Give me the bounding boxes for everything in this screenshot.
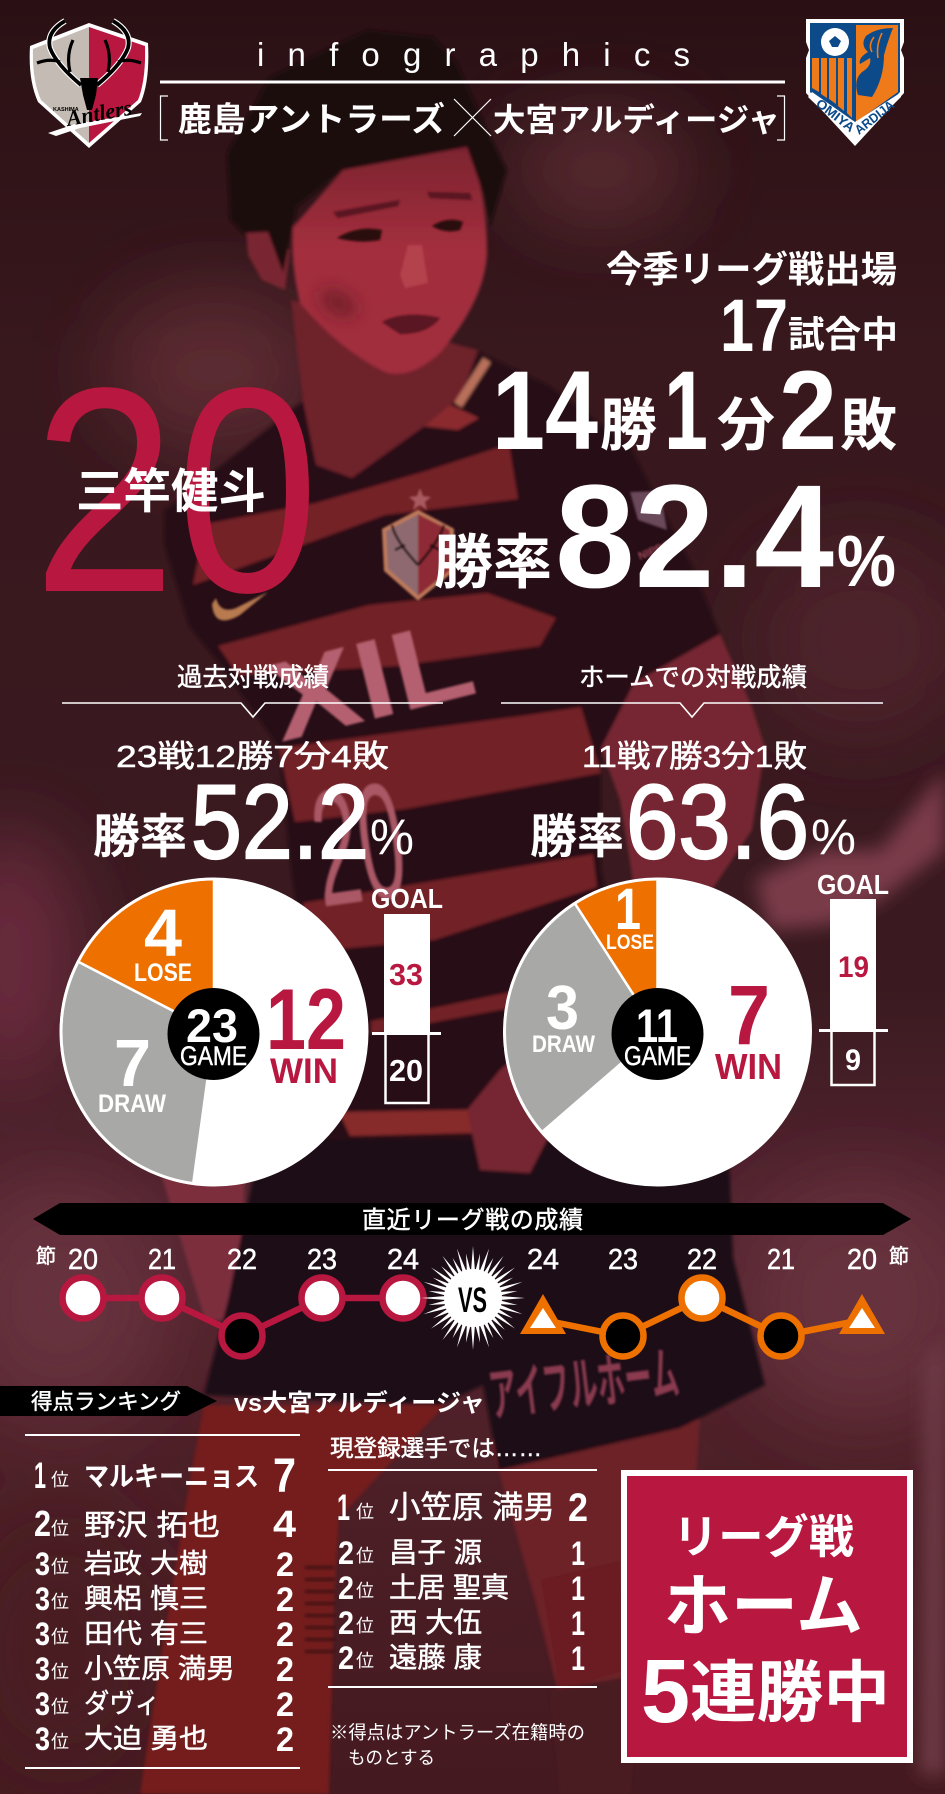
ranking table: current squad: 昌子 源 bbox=[389, 1537, 482, 1568]
results chain: Kashima bbox=[62, 1278, 424, 1356]
ranking table: all time: 2 bbox=[34, 1503, 51, 1544]
ranking table: current squad: 2 bbox=[338, 1640, 354, 1676]
season record block bbox=[434, 249, 898, 619]
pie chart: home record bbox=[504, 877, 810, 1185]
goal bar: home record bbox=[817, 869, 889, 1085]
ranking table: all time: 3 bbox=[35, 1721, 50, 1757]
ranking table: current squad: 2 bbox=[338, 1570, 354, 1606]
ear bbox=[246, 226, 290, 290]
past record stats: 52.2 bbox=[191, 764, 369, 881]
cheek shadow bbox=[316, 284, 360, 322]
ranking table: current squad: 土居 聖真 bbox=[389, 1572, 509, 1603]
round numbers: 23 bbox=[307, 1244, 337, 1276]
ranking table: all time: 位 bbox=[51, 1519, 69, 1539]
ranking table: all time: 3 bbox=[35, 1616, 50, 1652]
ranking table: all time: 2 bbox=[276, 1581, 294, 1619]
ranking table: all time: 大迫 勇也 bbox=[84, 1724, 208, 1754]
ranking table: current squad: 2 bbox=[338, 1535, 354, 1571]
hair bbox=[227, 30, 507, 273]
right arm and hand bbox=[467, 634, 765, 1173]
ranking table: all time: 位 bbox=[51, 1627, 69, 1647]
pie chart: past record: 7 bbox=[114, 1026, 151, 1101]
shorts bbox=[204, 1135, 765, 1470]
ranking table: current squad: 1 bbox=[571, 1605, 585, 1643]
ranking table: current squad: 位 bbox=[356, 1616, 374, 1636]
callout: five home wins in a row bbox=[621, 1470, 913, 1763]
pie chart: past record: 23 bbox=[186, 999, 238, 1052]
pie chart: past record: 12 bbox=[266, 972, 346, 1068]
past record stats: % bbox=[370, 809, 414, 865]
ranking table: all time: 位 bbox=[51, 1732, 69, 1752]
pie chart: past record bbox=[61, 879, 367, 1185]
goal bar: home record: 9 bbox=[845, 1044, 861, 1077]
ranking table: all time: 田代 有三 bbox=[84, 1619, 208, 1649]
pie chart: home record: 3 bbox=[546, 974, 579, 1043]
pie chart: home record: 1 bbox=[615, 877, 641, 942]
home record stats bbox=[530, 739, 856, 881]
ranking table: all time: 位 bbox=[51, 1557, 69, 1577]
pie chart: home record: WIN bbox=[715, 1046, 782, 1087]
torso bbox=[164, 352, 720, 1140]
season record block: 14 bbox=[492, 348, 598, 473]
ranking table: current squad: 位 bbox=[356, 1651, 374, 1671]
season record block: 勝率 bbox=[434, 530, 552, 596]
ranking table: all time: 4 bbox=[273, 1504, 296, 1546]
pie chart: past record: DRAW bbox=[98, 1090, 166, 1118]
tag: scoring ranking: 得点ランキング bbox=[31, 1390, 181, 1414]
ranking table: current squad: 1 bbox=[571, 1570, 585, 1608]
round numbers: 20 bbox=[68, 1244, 98, 1276]
eyes, brows, mouth, nose bbox=[333, 200, 400, 218]
home record stats: % bbox=[811, 809, 856, 865]
ranking table: all time: 2 bbox=[276, 1721, 294, 1759]
ranking table: current squad: 位 bbox=[356, 1546, 374, 1566]
far right figure bbox=[755, 770, 945, 930]
ranking table: current squad: 2 bbox=[568, 1486, 588, 1530]
callout: five home wins in a row: ホーム bbox=[664, 1569, 863, 1645]
left leg sock bbox=[140, 1405, 445, 1794]
logo: Kashima Antlers crest bbox=[30, 21, 148, 148]
pie chart: past record: 4 bbox=[144, 896, 182, 971]
VS burst: VS bbox=[458, 1281, 487, 1320]
season record block: 敗 bbox=[840, 394, 897, 458]
ranking table: current squad: 位 bbox=[356, 1581, 374, 1601]
ranking table: current squad: 1 bbox=[337, 1487, 350, 1528]
header: infographics title: 鹿島アントラーズ bbox=[178, 101, 445, 139]
ranking table: all time: 位 bbox=[51, 1470, 69, 1490]
season record block: 1 bbox=[664, 348, 708, 473]
season record block: 試合中 bbox=[788, 314, 898, 355]
results chain: Omiya bbox=[520, 1278, 885, 1356]
callout: five home wins in a row: 5 bbox=[641, 1642, 690, 1742]
ranking table: all time: 3 bbox=[35, 1581, 50, 1617]
logo: Omiya Ardija crest: OMIYA bbox=[813, 96, 858, 135]
ranking table: current squad: 2 bbox=[338, 1605, 354, 1641]
ranking table: all time: 位 bbox=[51, 1592, 69, 1612]
footnote: ものとする bbox=[348, 1748, 435, 1768]
background: player photo: アイフルホーム bbox=[486, 1341, 682, 1429]
round numbers: 21 bbox=[767, 1244, 795, 1276]
banner: recent league results: 直近リーグ戦の成績 bbox=[362, 1207, 583, 1234]
heading: vs Omiya Ardija: vs大宮アルディージャ bbox=[234, 1389, 485, 1417]
jersey stripes bbox=[422, 401, 479, 430]
callout: five home wins in a row: リーグ戦 bbox=[673, 1511, 854, 1563]
logo: Kashima Antlers crest: KASHIMA bbox=[53, 107, 79, 113]
neck bbox=[291, 300, 478, 478]
pie chart: home record: DRAW bbox=[532, 1031, 595, 1058]
ranking table: current squad: 1 bbox=[571, 1535, 585, 1573]
season record block: 17 bbox=[720, 284, 788, 367]
ranking table: all time: 岩政 大樹 bbox=[84, 1549, 208, 1579]
background: player photo: 20 bbox=[301, 747, 416, 942]
goal bar: home record: 19 bbox=[838, 951, 869, 984]
ranking table: current squad: 1 bbox=[571, 1640, 585, 1678]
logo: Kashima Antlers crest: Antlers bbox=[63, 95, 134, 131]
goal bar: past record: GOAL bbox=[371, 883, 443, 914]
ranking table: all time: 7 bbox=[273, 1450, 296, 1503]
section header: past record bbox=[62, 664, 443, 717]
background: player photo: NIPPON bbox=[637, 536, 680, 563]
ranking table: all time: 2 bbox=[276, 1686, 294, 1724]
ranking table: all time: 3 bbox=[35, 1546, 50, 1582]
season record block: 2 bbox=[779, 348, 837, 473]
ranking table: current squad: 小笠原 満男 bbox=[389, 1490, 555, 1525]
logo: Omiya Ardija crest bbox=[806, 19, 904, 146]
past record stats: 23戦12勝7分4敗 bbox=[116, 739, 389, 774]
ranking table: all time: 位 bbox=[51, 1697, 69, 1717]
season record block: 分 bbox=[717, 393, 775, 458]
ranking table: all time: 2 bbox=[276, 1546, 294, 1584]
pie chart: past record: GAME bbox=[180, 1041, 247, 1071]
ranking table: current squad: 遠藤 康 bbox=[389, 1642, 482, 1673]
ranking table: all time: マルキーニョス bbox=[84, 1462, 259, 1492]
ranking table: all time: ダヴィ bbox=[84, 1689, 160, 1719]
ranking table: all time: 野沢 拓也 bbox=[84, 1509, 220, 1542]
big uniform number 20: 20 bbox=[33, 327, 319, 653]
face bbox=[292, 147, 487, 374]
round numbers: 24 bbox=[387, 1244, 419, 1276]
footnote: ※得点はアントラーズ在籍時の bbox=[330, 1722, 585, 1743]
jersey prints: XIL bbox=[257, 594, 486, 765]
goal bar: past record: 33 bbox=[389, 957, 423, 992]
home record stats: 63.6 bbox=[626, 764, 809, 881]
round numbers: 節 bbox=[889, 1245, 909, 1268]
ranking table: all time: 2 bbox=[276, 1616, 294, 1654]
callout: five home wins in a row: 連勝中 bbox=[690, 1656, 890, 1731]
ranking table: all time bbox=[25, 1434, 300, 1769]
ranking table: all time: 興梠 慎三 bbox=[84, 1584, 208, 1614]
banner: recent league results bbox=[33, 1203, 911, 1235]
pie chart: home record: 7 bbox=[728, 968, 770, 1062]
season record block: 82.4 bbox=[555, 455, 834, 619]
heading: current squad: 現登録選手では…… bbox=[330, 1435, 542, 1461]
section header: past record: 過去対戦成績 bbox=[177, 664, 329, 692]
pie chart: home record: LOSE bbox=[606, 931, 654, 954]
pie chart: past record: WIN bbox=[270, 1052, 338, 1091]
left arm bbox=[160, 1170, 245, 1320]
goal bar: past record: 20 bbox=[389, 1053, 423, 1088]
footnote bbox=[330, 1722, 585, 1768]
pie chart: home record: 11 bbox=[636, 999, 678, 1052]
round numbers: 節 bbox=[36, 1245, 56, 1268]
ranking table: all time: 位 bbox=[51, 1662, 69, 1682]
round numbers: 23 bbox=[608, 1244, 638, 1276]
home record stats: 11戦7勝3分1敗 bbox=[582, 739, 807, 774]
right leg bbox=[490, 1420, 700, 1700]
ranking table: all time: 3 bbox=[35, 1686, 50, 1722]
header: infographics title: 大宮アルディージャ bbox=[493, 102, 780, 138]
round numbers: 21 bbox=[148, 1244, 176, 1276]
ranking table: all time: 2 bbox=[276, 1651, 294, 1689]
round numbers: 22 bbox=[227, 1244, 257, 1276]
header: infographics title: infographics bbox=[257, 36, 690, 73]
goal bar: past record bbox=[371, 883, 443, 1103]
collar bbox=[458, 360, 487, 405]
pie chart: past record: LOSE bbox=[134, 959, 192, 987]
section header: home record bbox=[501, 664, 883, 717]
season record block: 今季リーグ戦出場 bbox=[606, 249, 897, 290]
goal bar: home record: GOAL bbox=[817, 869, 889, 900]
round numbers: 22 bbox=[687, 1244, 717, 1276]
header: infographics title bbox=[160, 36, 785, 140]
player name: 三竿健斗 bbox=[76, 466, 266, 519]
ranking table: all time: 1 bbox=[34, 1455, 46, 1496]
ranking table: all time: 3 bbox=[35, 1651, 50, 1687]
past record stats: 勝率 bbox=[93, 810, 187, 863]
ranking table: current squad: 西 大伍 bbox=[389, 1607, 482, 1638]
VS burst bbox=[421, 1246, 525, 1350]
pie chart: home record: GAME bbox=[624, 1041, 691, 1071]
season record block: 勝 bbox=[600, 394, 657, 458]
season record block: % bbox=[837, 522, 896, 602]
section header: home record: ホームでの対戦成績 bbox=[579, 664, 807, 692]
round numbers: 20 bbox=[847, 1244, 877, 1276]
round numbers: 24 bbox=[527, 1244, 559, 1276]
home record stats: 勝率 bbox=[530, 810, 624, 863]
logo: Omiya Ardija crest: ARDIJA bbox=[852, 97, 898, 137]
past record stats bbox=[93, 739, 414, 881]
tag: scoring ranking bbox=[0, 1386, 217, 1416]
ranking table: current squad bbox=[328, 1469, 597, 1688]
ranking table: current squad: 位 bbox=[356, 1502, 374, 1522]
round numbers bbox=[36, 1244, 909, 1276]
ranking table: all time: 小笠原 満男 bbox=[84, 1654, 235, 1684]
